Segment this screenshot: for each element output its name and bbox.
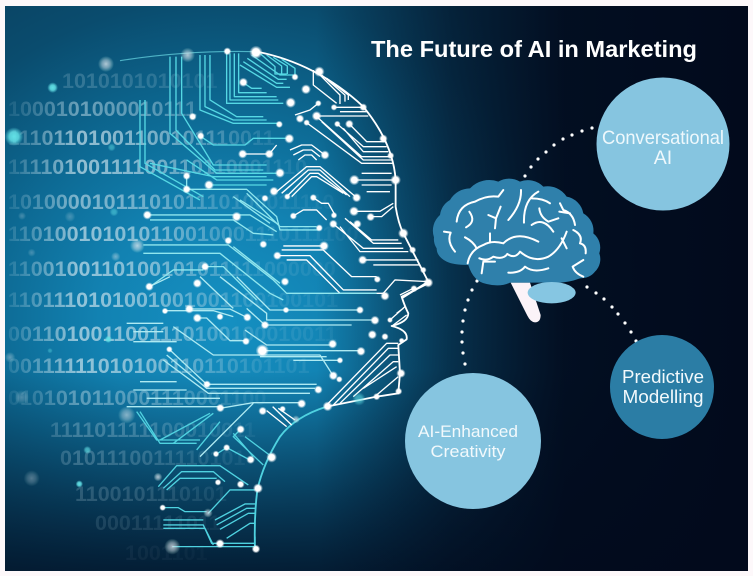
binary digit background: 1010000101110101110100011110	[8, 190, 335, 214]
circuit nodes upper	[5, 46, 433, 301]
circle: AI-enhanced creativity: Creativity	[430, 442, 506, 461]
binary digit background: 111101111100010011	[50, 418, 256, 442]
brain folds	[444, 190, 586, 277]
circle: predictive modelling: Modelling	[622, 387, 704, 407]
dotted connector: brain to conversational AI	[523, 126, 594, 178]
binary digit background: 11110100111100110110001110	[8, 155, 307, 179]
binary digit background: 00011111011	[95, 511, 221, 535]
circle: predictive modelling	[610, 335, 714, 439]
dotted connector: brain to AI-enhanced creativity	[460, 279, 479, 366]
binary digit background: 1001101	[125, 541, 208, 565]
brain body	[433, 179, 600, 285]
cerebellum	[528, 282, 576, 303]
binary digit background: 1100101110101	[75, 482, 227, 506]
brain stem	[511, 283, 541, 322]
title: The Future of AI in Marketing	[371, 36, 697, 62]
binary digit background: 11101101001100101110011	[8, 126, 275, 150]
circuit traces: jaw and neck	[127, 277, 375, 457]
binary digit background: 0101010110001110001100	[8, 386, 266, 410]
circle: conversational AI: Conversational	[602, 127, 724, 149]
binary digit background: 0101110011110101	[60, 446, 245, 470]
binary digit background: 0011010011001110100100010011	[8, 322, 337, 346]
circle: AI-enhanced creativity: AI-Enhanced	[418, 422, 518, 441]
binary digit background: 00111111010100110110101101	[8, 354, 309, 378]
circuit traces: mid face	[143, 176, 377, 300]
binary digit background: 1101110101001001001100100101	[8, 288, 338, 312]
dotted connector: brain to predictive modelling	[585, 285, 638, 343]
circle: conversational AI: AI	[654, 147, 672, 169]
binary digit background: 1100100110100101011111000000	[8, 257, 336, 281]
binary digit background: 110100101010110010001110111100	[8, 222, 358, 246]
head circuit illustration	[120, 51, 428, 548]
binary digit background: 1000101000010111	[8, 97, 197, 121]
binary digit background: 1010101010101	[62, 69, 217, 93]
circuit traces: right face	[243, 70, 428, 295]
circle: predictive modelling: Predictive	[622, 367, 704, 387]
icon: brain	[433, 179, 600, 322]
circuit traces: upper crown	[140, 52, 295, 200]
circle: conversational AI	[596, 78, 730, 210]
head outline	[257, 52, 428, 298]
circle: AI-enhanced creativity	[405, 373, 541, 509]
circuit nodes lower	[5, 304, 406, 555]
binary digit background	[8, 69, 358, 565]
